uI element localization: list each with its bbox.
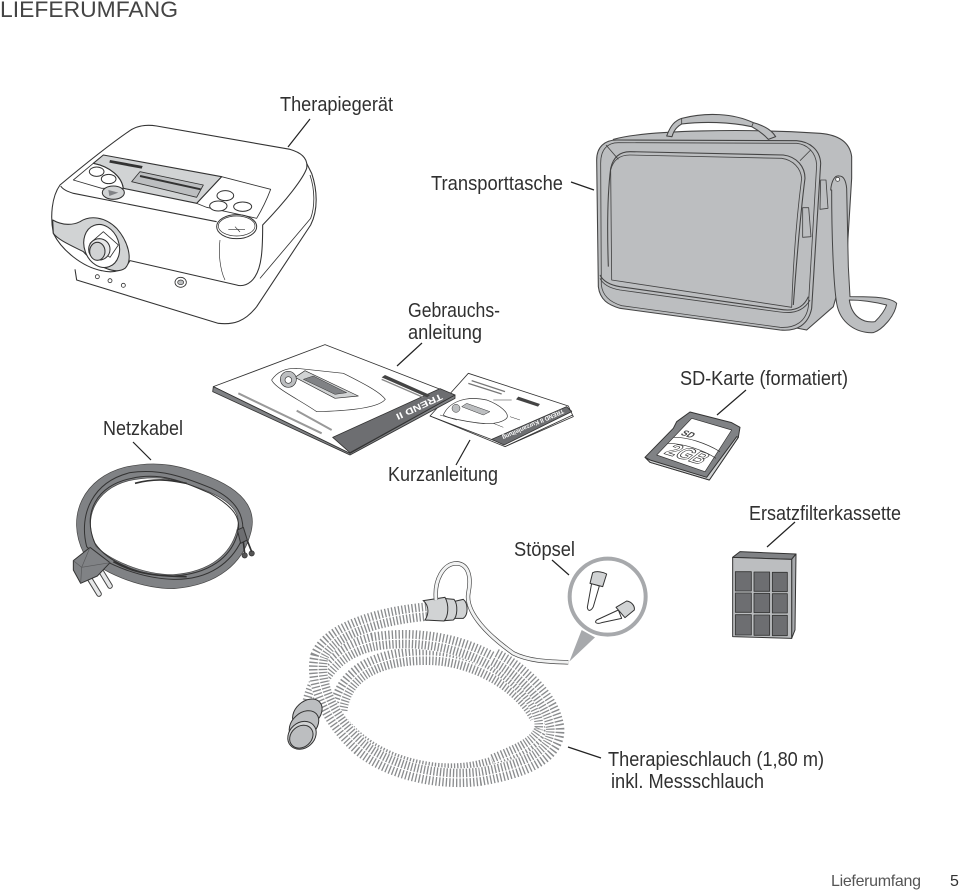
icon: therapy device <box>52 125 316 324</box>
cuff end <box>282 693 328 755</box>
small manual: TREND II Kurzanleitung <box>501 407 565 441</box>
label: Ersatzfilterkassette <box>749 503 901 547</box>
handle <box>667 114 776 139</box>
footer: page number: 5 <box>950 873 959 890</box>
label: Stöpsel: Stöpsel <box>514 539 575 561</box>
icon: SD card: 2GB <box>659 441 716 468</box>
label: Therapiegerät: Therapiegerät <box>280 94 393 116</box>
icon: transport bag <box>597 114 897 333</box>
large manual: TREND II <box>395 392 444 422</box>
label: Therapieschlauch: Therapieschlauch (1,80 m) <box>608 749 824 771</box>
footer: page number: Lieferumfang <box>831 873 921 890</box>
icon: filter cassette <box>733 552 796 638</box>
outer coil from top connector <box>318 612 555 778</box>
callout: plug magnifier <box>569 559 646 662</box>
small manual <box>430 373 573 447</box>
label: Netzkabel: Netzkabel <box>103 418 183 440</box>
large manual <box>213 345 455 455</box>
label: SD-Karte <box>680 368 848 415</box>
lower inner coil <box>337 720 510 773</box>
label: Kurzanleitung: Kurzanleitung <box>388 464 498 486</box>
plug 2 <box>596 610 622 623</box>
brand mark <box>109 160 143 169</box>
label: Transporttasche: Transporttasche <box>431 173 563 195</box>
pressure line <box>436 563 568 662</box>
label: Kurzanleitung <box>388 440 498 486</box>
icon: power cable <box>73 471 254 594</box>
label: Gebrauchsanleitung: Gebrauchs- <box>408 300 500 322</box>
label: Stöpsel <box>514 539 575 575</box>
label: Therapieschlauch <box>568 747 824 793</box>
upper inner coil <box>338 656 538 717</box>
label: Therapieschlauch: inkl. Messschlauch <box>611 771 764 793</box>
label: Netzkabel <box>103 418 183 460</box>
label: Gebrauchsanleitung <box>397 300 500 366</box>
label: Ersatzfilterkassette: Ersatzfilterkassette <box>749 503 901 525</box>
label: Therapiegerät <box>280 94 393 147</box>
icon: therapy hose <box>282 563 568 778</box>
label: SD-Karte: SD-Karte (formatiert) <box>680 368 848 390</box>
strap <box>831 176 897 333</box>
icon: SD card: SD <box>678 429 698 440</box>
plug 1 <box>587 583 599 610</box>
icon: SD card <box>645 412 740 480</box>
top connector <box>423 597 467 621</box>
icon: manuals <box>213 345 573 455</box>
inner coil from cuff <box>312 639 544 763</box>
label: Gebrauchsanleitung: anleitung <box>408 322 482 344</box>
